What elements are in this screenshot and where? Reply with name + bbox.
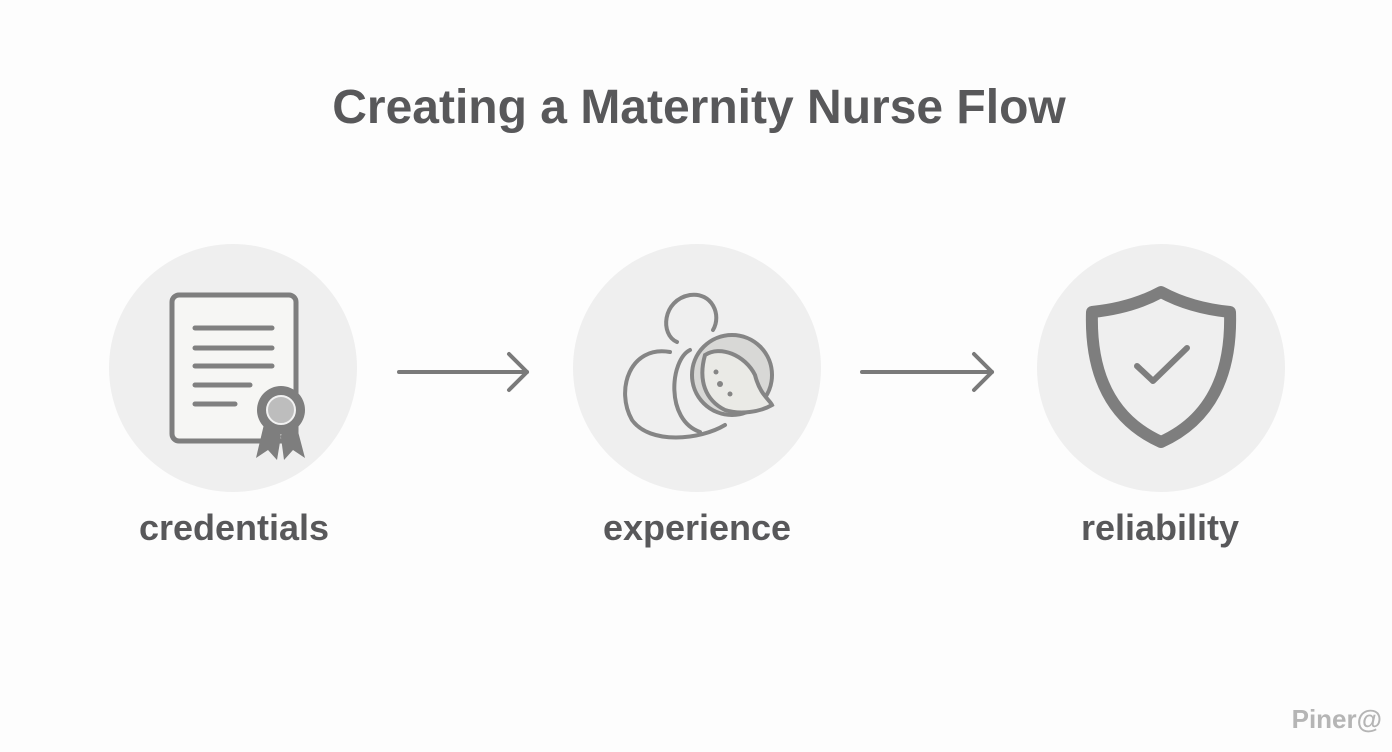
step: reliability bbox=[1037, 244, 1285, 548]
label: reliability: reliability bbox=[1081, 507, 1239, 548]
label: experience: experience bbox=[603, 507, 791, 548]
logo: Piner@ bbox=[1292, 704, 1382, 734]
step: credentials bbox=[109, 244, 357, 548]
icon: shield check bbox=[1037, 244, 1285, 492]
icon: certificate bbox=[109, 244, 357, 492]
icon: mother and baby bbox=[573, 244, 821, 492]
arrow 1 bbox=[399, 354, 527, 390]
title: Creating a Maternity Nurse Flow bbox=[332, 81, 1066, 134]
arrow 2 bbox=[862, 354, 992, 390]
step: experience bbox=[573, 244, 821, 548]
label: credentials: credentials bbox=[139, 507, 329, 548]
